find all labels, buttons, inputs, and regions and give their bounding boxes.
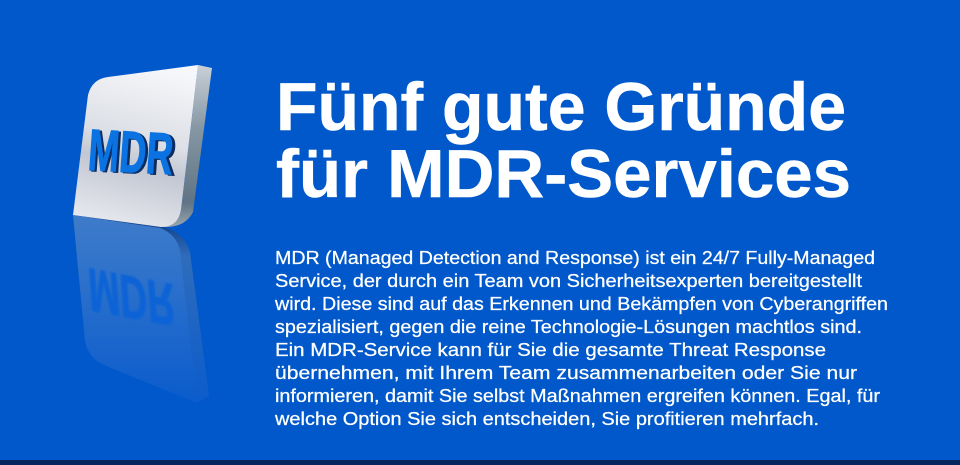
icon: MDR tile: MDR <box>86 117 176 187</box>
title: für MDR-Services <box>276 136 851 212</box>
icon: MDR reflection: MDR <box>86 255 177 340</box>
body text: informieren, damit Sie selbst Maßnahmen ergreifen können. Egal, für <box>275 386 880 406</box>
body text: spezialisiert, gegen die reine Technologie-Lösungen machtlos sind. <box>275 317 862 337</box>
body text: welche Option Sie sich entscheiden, Sie profitieren mehrfach. <box>274 409 819 429</box>
body text: Service, der durch ein Team von Sicherheitsexperten bereitgestellt <box>275 271 862 291</box>
bottom dark strip <box>0 460 960 465</box>
title <box>276 69 851 212</box>
icon: MDR reflection <box>73 215 209 403</box>
body text: wird. Diese sind auf das Erkennen und Bekämpfen von Cyberangriffen <box>274 294 888 314</box>
body text: Ein MDR-Service kann für Sie die gesamte Threat Response <box>275 340 826 360</box>
body text <box>274 248 888 429</box>
icon: MDR tile <box>73 65 212 227</box>
title: Fünf gute Gründe <box>276 69 846 145</box>
body text: übernehmen, mit Ihrem Team zusammenarbeiten oder Sie nur <box>275 363 857 383</box>
body text: MDR (Managed Detection and Response) ist ein 24/7 Fully-Managed <box>275 248 875 268</box>
icon label: MDR: MDR <box>88 118 179 188</box>
